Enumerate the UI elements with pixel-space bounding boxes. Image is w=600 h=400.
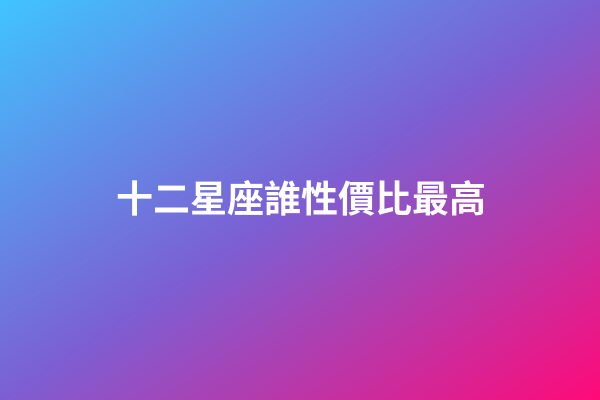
title: 十二星座誰性價比最高 — [116, 179, 486, 220]
